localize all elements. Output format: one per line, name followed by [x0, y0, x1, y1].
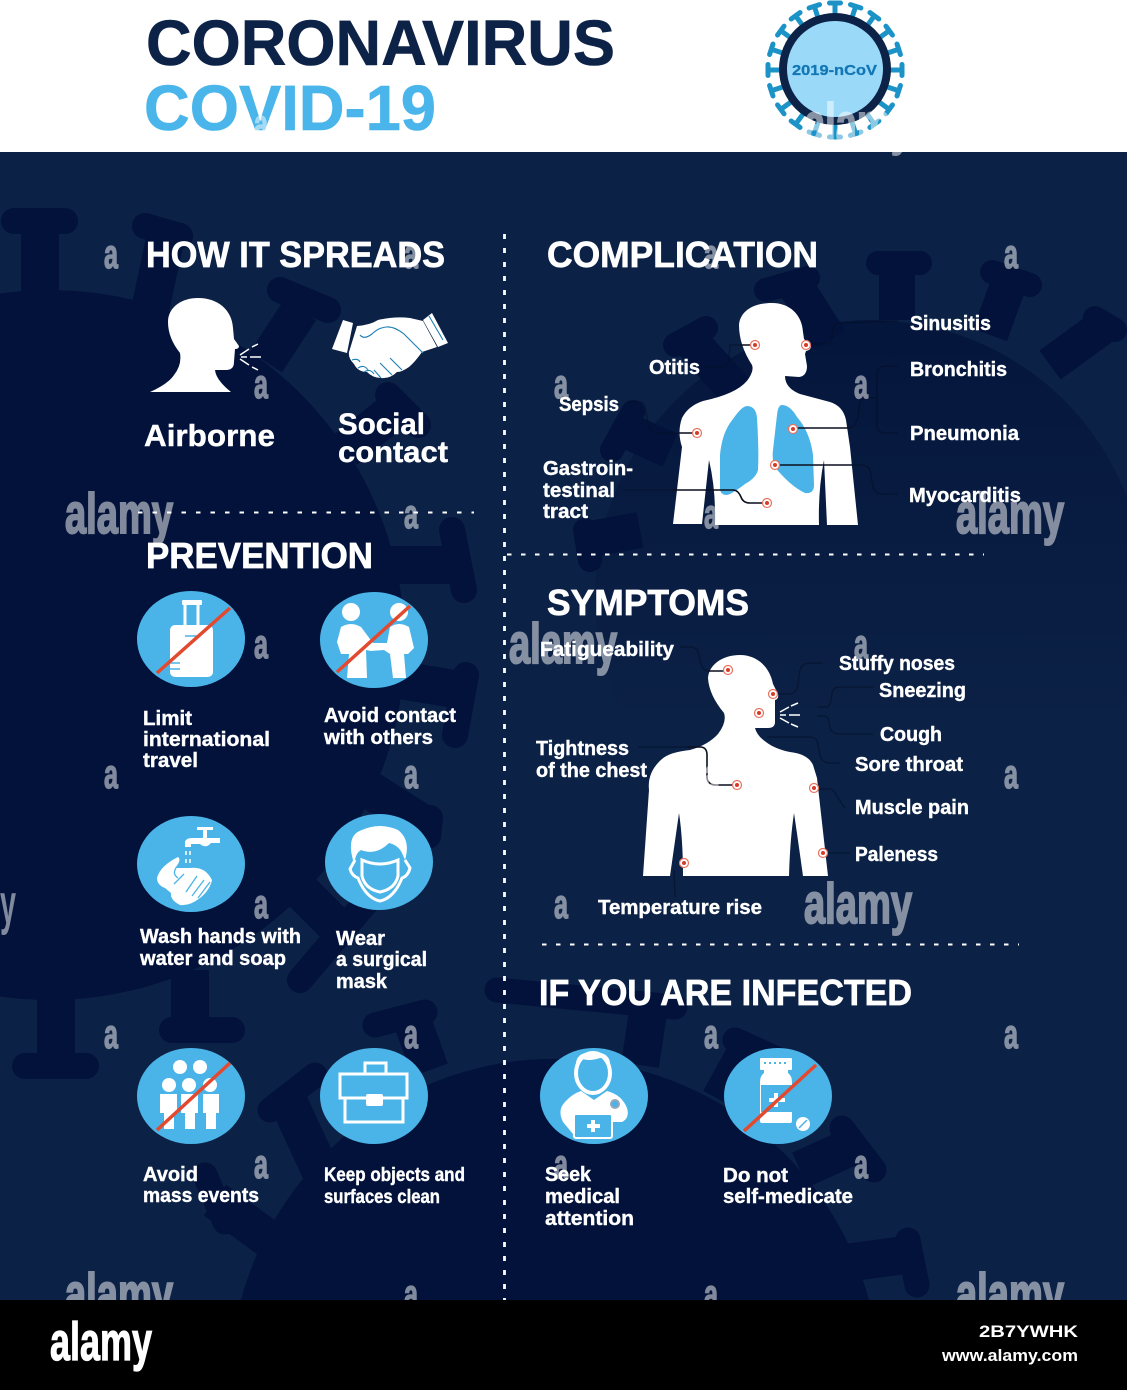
label: seek medical attention: Seek: [545, 1164, 592, 1186]
icon: handshake: [332, 313, 448, 378]
labels: symptoms: Paleness: [855, 844, 938, 866]
label: wear a surgical mask: [336, 928, 427, 993]
diagram: symptoms body: [638, 647, 873, 897]
label: keep objects and surfaces clean: Keep objects and: [324, 1165, 465, 1186]
stock watermark: alamy: [509, 612, 617, 676]
label: avoid contact with others: [323, 705, 456, 749]
labels: symptoms: Stuffy noses: [839, 653, 955, 675]
stock watermark: a: [554, 1141, 569, 1187]
label: limit international travel: international: [143, 729, 270, 751]
labels: symptoms: Cough: [880, 724, 942, 746]
stock watermark: a: [704, 751, 719, 797]
labels: symptoms: Tightness: [536, 738, 629, 760]
stock watermark: a: [404, 1271, 419, 1317]
label: avoid mass events: mass events: [143, 1185, 259, 1207]
icon: avoid mass events: [137, 1048, 245, 1144]
label: seek medical attention: medical: [545, 1186, 620, 1208]
label: social contact: Social: [338, 408, 425, 441]
icon: no self-medication: [724, 1048, 832, 1144]
stock watermark: a: [404, 231, 419, 277]
stock watermark: a: [854, 621, 869, 667]
label: avoid contact with others: with others: [323, 727, 433, 749]
label: limit international travel: travel: [143, 750, 198, 772]
stock watermark: alamy: [956, 482, 1064, 546]
label: wear a surgical mask: mask: [336, 971, 388, 993]
icon: no travel: [137, 591, 245, 687]
header title: COVID-19: [144, 72, 436, 144]
stock watermark: a: [704, 1011, 719, 1057]
label: avoid mass events: [143, 1164, 259, 1207]
stock watermark: a: [254, 621, 269, 667]
stock watermark: a: [704, 231, 719, 277]
label: limit international travel: Limit: [143, 708, 192, 730]
icon: 2019-nCoV virus badge: [768, 3, 902, 137]
label: avoid contact with others: Avoid contact: [324, 705, 456, 727]
label: seek medical attention: attention: [545, 1208, 634, 1230]
stock watermark: a: [854, 1141, 869, 1187]
labels: symptoms: Muscle pain: [855, 797, 969, 819]
stock watermark: a: [854, 361, 869, 407]
heading: prevention: PREVENTION: [146, 535, 373, 576]
icon: surgical mask: [325, 814, 433, 910]
labels: symptoms: of the chest: [536, 760, 647, 782]
labels: symptoms: Sneezing: [879, 680, 966, 702]
stock watermark: alamy: [804, 92, 912, 156]
labels: complications: [543, 313, 1021, 523]
heading: how it spreads: HOW IT SPREADS: [146, 234, 445, 275]
stock watermark: a: [1004, 751, 1019, 797]
stock watermark: a: [254, 1141, 269, 1187]
icon: avoid contact: [320, 592, 428, 688]
footer bar: [0, 1300, 1127, 1390]
label: do not self-medicate: Do not: [723, 1165, 788, 1187]
stock watermark: a: [404, 751, 419, 797]
labels: complications: tract: [543, 501, 588, 523]
footer bar: alamy: [50, 1312, 152, 1372]
heading: if you are infected: IF YOU ARE INFECTED: [539, 972, 912, 1013]
header title: CORONAVIRUS: [146, 7, 615, 79]
label: wear a surgical mask: Wear: [336, 928, 385, 950]
stock watermark: a: [1004, 231, 1019, 277]
labels: symptoms: Fatigueability: [540, 639, 675, 661]
stock watermark: a: [704, 491, 719, 537]
stock watermark: alamy: [65, 1262, 173, 1326]
label: keep objects and surfaces clean: surfaces clean: [324, 1187, 440, 1208]
labels: complications: Myocarditis: [909, 485, 1021, 507]
label: avoid mass events: Avoid: [143, 1164, 198, 1186]
watermark fragment: left edge: [0, 888, 14, 936]
stock watermark: a: [1004, 1011, 1019, 1057]
labels: symptoms: Temperature rise: [598, 897, 762, 919]
labels: complications: Pneumonia: [910, 423, 1020, 445]
stock watermark: a: [554, 881, 569, 927]
label: wash hands with water and soap: water and soap: [139, 948, 286, 970]
labels: symptoms: Sore throat: [855, 754, 963, 776]
icon: doctor: [540, 1048, 648, 1144]
labels: complications: Bronchitis: [910, 359, 1007, 381]
stock watermark: alamy: [804, 872, 912, 936]
stock watermark: a: [104, 231, 119, 277]
labels: complications: testinal: [543, 480, 615, 502]
stock watermark: alamy: [956, 1262, 1064, 1326]
label: do not self-medicate: self-medicate: [723, 1186, 853, 1208]
label: social contact: contact: [338, 436, 448, 469]
stock watermark: a: [404, 491, 419, 537]
label: do not self-medicate: [723, 1165, 853, 1208]
stock watermark: a: [554, 361, 569, 407]
heading: complication: COMPLICATION: [547, 234, 818, 275]
stock watermark: a: [254, 101, 269, 147]
diagram: complication body: [623, 303, 898, 525]
stock watermark: a: [254, 361, 269, 407]
icon: wash hands: [137, 816, 245, 912]
labels: symptoms: [536, 639, 969, 919]
label: seek medical attention: [545, 1164, 634, 1230]
footer bar: 2B7YWHK: [979, 1322, 1079, 1341]
label: airborne: Airborne: [144, 418, 275, 453]
icon: briefcase: [320, 1048, 428, 1144]
stock watermark: [65, 92, 1064, 1326]
label: wash hands with water and soap: [139, 926, 301, 970]
labels: complications: Sepsis: [559, 394, 619, 416]
stock watermark: alamy: [65, 482, 173, 546]
stock watermark: a: [104, 1011, 119, 1057]
labels: complications: Otitis: [649, 357, 700, 379]
label: wear a surgical mask: a surgical: [336, 949, 427, 971]
watermark fragment: y at left edge: y: [0, 872, 16, 936]
dividers: [138, 234, 1019, 1300]
icon: airborne head: [150, 298, 261, 392]
label: limit international travel: [143, 708, 270, 772]
labels: complications: Gastroin-: [543, 458, 633, 480]
stock watermark: a: [104, 751, 119, 797]
stock watermark: a: [404, 1011, 419, 1057]
label: social contact: [338, 408, 448, 469]
footer bar: www.alamy.com: [941, 1346, 1078, 1365]
header title: [144, 7, 615, 144]
heading: symptoms: SYMPTOMS: [547, 582, 749, 623]
stock watermark: a: [254, 881, 269, 927]
icon: 2019-nCoV virus badge: 2019-nCoV: [792, 62, 877, 79]
label: wash hands with water and soap: Wash hands with: [140, 926, 301, 948]
label: keep objects and surfaces clean: [324, 1165, 465, 1208]
stock watermark: a: [704, 1271, 719, 1317]
labels: complications: Sinusitis: [910, 313, 991, 335]
